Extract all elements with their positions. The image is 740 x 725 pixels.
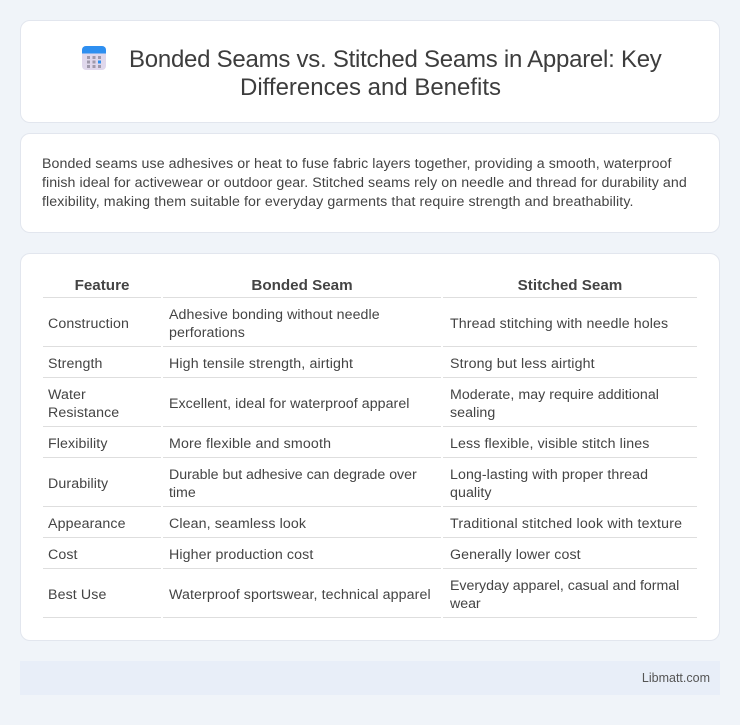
intro text: Bonded seams use adhesives or heat to fuse fabric layers together, providing a smooth, waterproof xyxy=(42,156,672,172)
row: durability: Durable but adhesive can degrade over xyxy=(169,467,417,483)
intro text xyxy=(42,156,687,210)
row: durability: quality xyxy=(450,485,492,501)
panel: comparison table xyxy=(20,253,720,641)
row: flexibility xyxy=(48,436,649,452)
row: appearance: Clean, seamless look xyxy=(169,516,306,532)
row: water resistance: Excellent, ideal for waterproof apparel xyxy=(169,396,410,412)
row: strength: High tensile strength, airtight xyxy=(169,356,353,372)
table header: Bonded Seam xyxy=(251,277,353,294)
table header: Stitched Seam xyxy=(518,277,622,294)
row: flexibility: More flexible and smooth xyxy=(169,436,331,452)
row: appearance: Traditional stitched look with texture xyxy=(450,516,682,532)
row: cost: Cost xyxy=(48,547,78,563)
row: best use: Waterproof sportswear, technical apparel xyxy=(169,587,431,603)
row: cost xyxy=(48,547,581,563)
heading xyxy=(129,46,662,101)
row: construction xyxy=(48,307,668,341)
row: appearance xyxy=(48,516,682,532)
row: construction: Construction xyxy=(48,316,129,332)
row: flexibility: Flexibility xyxy=(48,436,108,452)
row: appearance: Appearance xyxy=(48,516,126,532)
row: durability xyxy=(48,467,648,501)
row: strength: Strong but less airtight xyxy=(450,356,595,372)
row: cost: Higher production cost xyxy=(169,547,313,563)
row: cost: Generally lower cost xyxy=(450,547,581,563)
footer credit: Libmatt.com xyxy=(642,671,710,685)
table header xyxy=(75,277,622,294)
row: durability: Durability xyxy=(48,476,108,492)
row: water resistance xyxy=(48,387,659,421)
row: best use: Everyday apparel, casual and formal xyxy=(450,578,679,594)
row: durability: time xyxy=(169,485,196,501)
row: best use: Best Use xyxy=(48,587,106,603)
table header: Feature xyxy=(75,277,129,294)
row: strength: Strength xyxy=(48,356,103,372)
row: water resistance: Resistance xyxy=(48,405,119,421)
row: water resistance: sealing xyxy=(450,405,495,421)
icon: calendar xyxy=(82,46,106,70)
row: strength xyxy=(48,356,595,372)
title card xyxy=(20,20,720,123)
row: construction: Adhesive bonding without needle xyxy=(169,307,380,323)
row: construction: Thread stitching with needle holes xyxy=(450,316,668,332)
row: best use xyxy=(48,578,679,612)
intro text: finish ideal for activewear or outdoor gear. Stitched seams rely on needle and thread for durability and xyxy=(42,175,687,191)
row: best use: wear xyxy=(450,596,481,612)
row: water resistance: Moderate, may require additional xyxy=(450,387,659,403)
row: construction: perforations xyxy=(169,325,245,341)
footer xyxy=(20,661,720,695)
row: durability: Long-lasting with proper thread xyxy=(450,467,648,483)
row: water resistance: Water xyxy=(48,387,86,403)
row: flexibility: Less flexible, visible stitch lines xyxy=(450,436,649,452)
heading: Differences and Benefits xyxy=(240,74,501,101)
intro text: flexibility, making them suitable for everyday garments that require strength and breathability. xyxy=(42,194,634,210)
panel: intro xyxy=(20,133,720,233)
heading: Bonded Seams vs. Stitched Seams in Apparel: Key xyxy=(129,46,662,73)
